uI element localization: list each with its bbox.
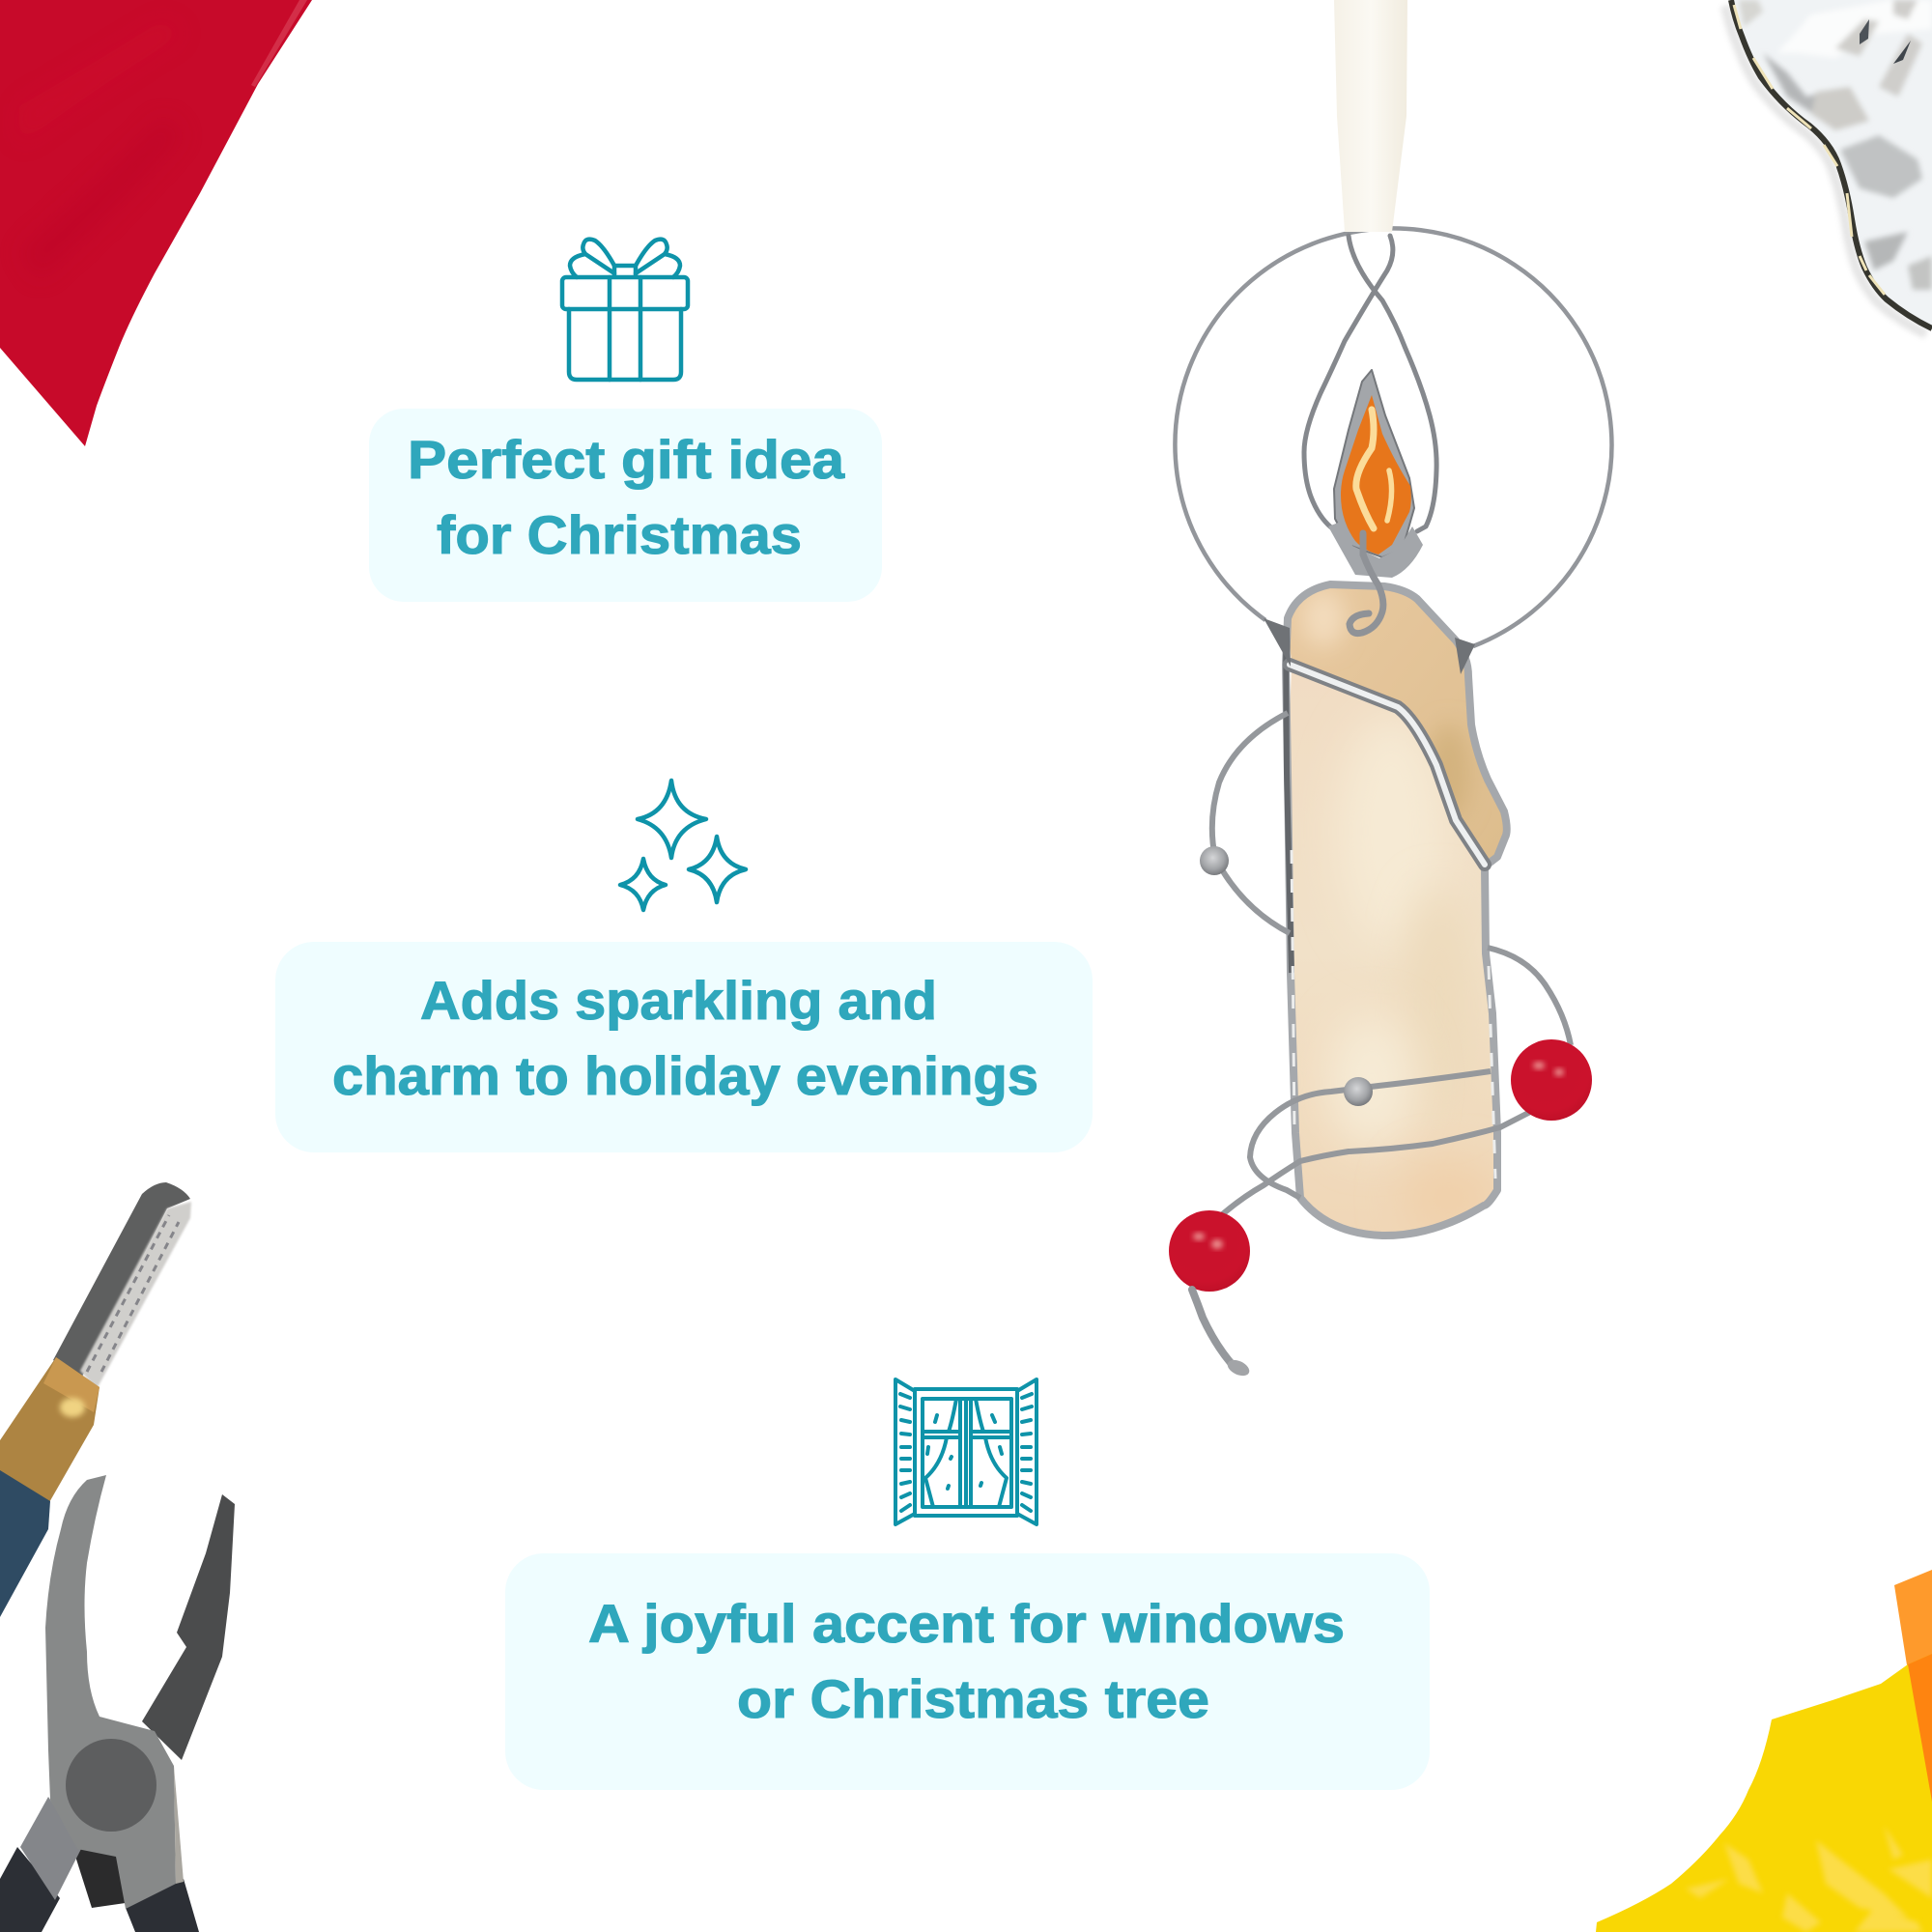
text: perfect gift idea: Perfect gift idea — [408, 429, 845, 490]
flame — [1334, 370, 1414, 557]
red glass sheet, top left — [0, 0, 312, 446]
left arm wire with ball — [1200, 713, 1290, 933]
handles — [0, 1847, 60, 1932]
wick — [1350, 533, 1383, 634]
tail drop — [1225, 1357, 1252, 1378]
yellow and orange glass sheets, bottom right — [1596, 1570, 1932, 1932]
panel 1 — [369, 409, 882, 602]
left jaw and head — [45, 1475, 176, 1909]
lower candle glass — [1291, 672, 1493, 1232]
glass cutter tool — [0, 1182, 191, 1617]
callout 3: window accent — [505, 1379, 1430, 1790]
callout 1: gift idea — [369, 240, 882, 602]
lower wire with ball — [1250, 1071, 1491, 1198]
solder base under flame — [1328, 522, 1423, 578]
spring — [72, 1847, 126, 1908]
wire between berries — [1219, 1109, 1536, 1217]
icon: gift box — [562, 240, 688, 380]
pivot — [66, 1739, 156, 1832]
icon: sparkles — [620, 781, 746, 910]
brass ferrule — [0, 1357, 99, 1504]
text: adds sparkling: charm to holiday evenings — [332, 1045, 1038, 1106]
text: joyful accent: A joyful accent for windows — [588, 1593, 1345, 1654]
textured clear glass, top right — [1719, 0, 1932, 334]
solder outline — [1286, 584, 1507, 1236]
pliers — [0, 1475, 235, 1932]
handle — [0, 1470, 50, 1617]
red bead, left — [1169, 1210, 1250, 1292]
right jaw — [142, 1494, 235, 1760]
tail wire — [1192, 1290, 1232, 1364]
twisted wire loop — [1304, 236, 1436, 531]
icon: window with curtains — [895, 1379, 1037, 1524]
upper candle glass — [1291, 588, 1503, 859]
ribbon — [1334, 0, 1407, 232]
panel 3 — [505, 1553, 1430, 1790]
left grip — [20, 1797, 82, 1900]
wire halo ring — [1175, 228, 1611, 646]
text: joyful accent: or Christmas tree — [737, 1668, 1209, 1729]
panel 2 — [275, 942, 1093, 1152]
callout 2: sparkling — [275, 781, 1093, 1152]
text: adds sparkling: Adds sparkling and — [420, 970, 937, 1031]
solder divider line — [1290, 665, 1485, 865]
blade — [53, 1182, 190, 1377]
ring joints — [1264, 618, 1475, 674]
text: perfect gift idea: for Christmas — [437, 504, 802, 565]
right arm wire — [1488, 948, 1571, 1045]
red bead, right — [1511, 1039, 1592, 1121]
ornament: stained glass candle — [1169, 0, 1611, 1378]
